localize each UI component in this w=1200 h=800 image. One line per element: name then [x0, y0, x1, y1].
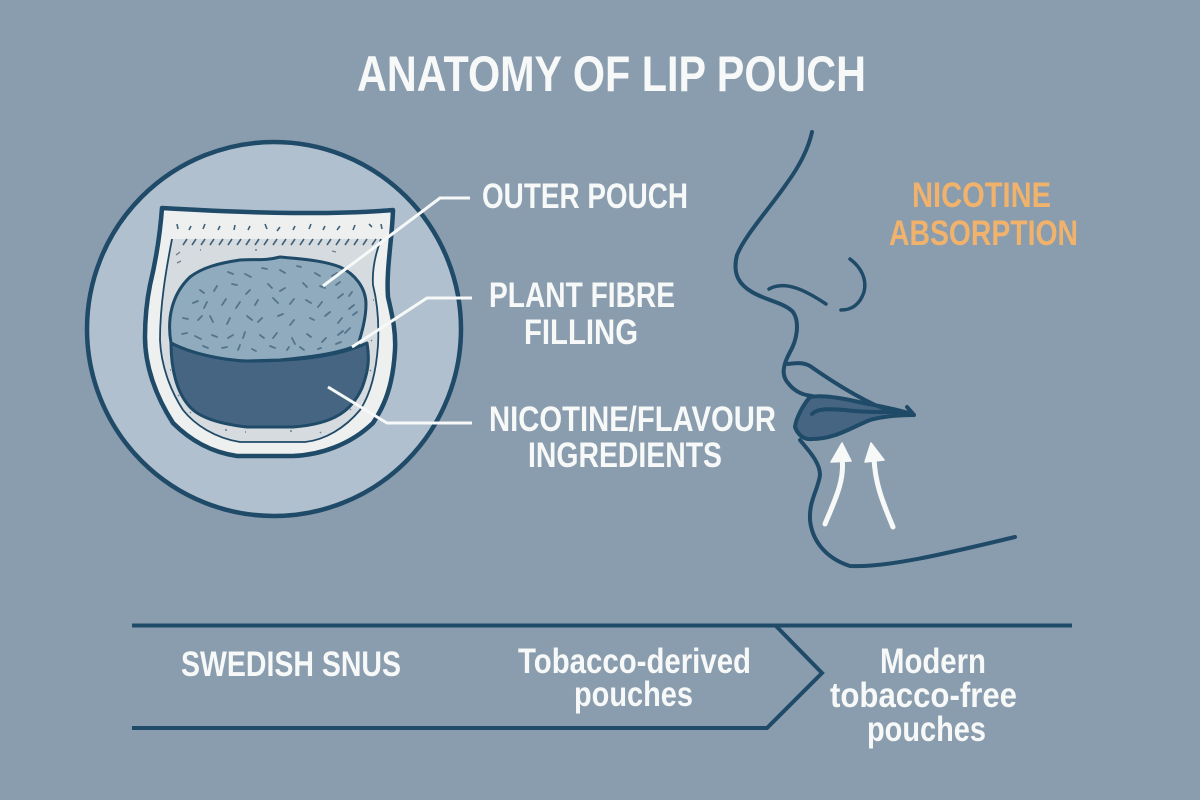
nicotine and flavour ingredients: [171, 343, 368, 427]
label: nicotine absorption: ABSORPTION: [889, 214, 1078, 253]
fibre texture: [182, 266, 357, 351]
label: nicotine/flavour ingredients: NICOTINE/FLAVOUR: [489, 400, 776, 439]
leader: plant fibre filling: [352, 298, 472, 347]
chin and jaw line: [800, 440, 1015, 566]
stitching on seal: [177, 224, 382, 245]
panel: face profile: [735, 132, 1015, 566]
arrow: absorption left: [825, 443, 851, 524]
nose and upper face line: [735, 132, 812, 396]
lower lip: [795, 396, 914, 439]
plant fibre filling: [170, 257, 366, 361]
circle background: [87, 142, 461, 516]
timeline: modern tobacco-free pouches: [830, 642, 1017, 749]
label: nicotine/flavour ingredients: [489, 400, 776, 475]
inner pouch layer: [160, 239, 381, 442]
label: plant fibre filling: [489, 276, 675, 352]
label: plant fibre filling: PLANT FIBRE: [489, 276, 675, 315]
upper lip: [788, 363, 914, 415]
timeline arrow: [132, 626, 1072, 728]
panel: pouch diagram: [87, 142, 472, 516]
timeline: swedish snus: SWEDISH SNUS: [181, 645, 401, 684]
timeline: modern tobacco-free pouches: tobacco-free: [830, 676, 1017, 715]
timeline: tobacco-derived pouches: pouches: [574, 675, 693, 714]
mouth line: [812, 409, 895, 414]
speckles: [170, 250, 374, 433]
inner pouch seam: [160, 239, 381, 442]
leader: nicotine and flavour: [328, 387, 472, 423]
arrow: absorption right: [865, 443, 893, 527]
timeline: tobacco-derived pouches: Tobacco-derived: [518, 642, 751, 681]
label: plant fibre filling: FILLING: [524, 313, 638, 352]
label: nicotine absorption: [889, 176, 1078, 253]
outer pouch: [145, 208, 395, 456]
label: outer pouch: OUTER POUCH: [482, 177, 688, 216]
timeline: modern tobacco-free pouches: Modern: [880, 642, 986, 681]
nose wing: [841, 259, 865, 310]
timeline: modern tobacco-free pouches: pouches: [867, 710, 986, 749]
label: nicotine/flavour ingredients: INGREDIENTS: [528, 436, 722, 475]
label: nicotine absorption: NICOTINE: [912, 176, 1051, 215]
leader: outer pouch: [323, 198, 470, 286]
title: ANATOMY OF LIP POUCH: [357, 46, 866, 102]
timeline: tobacco-derived pouches: [518, 642, 751, 714]
nostril: [769, 286, 826, 304]
